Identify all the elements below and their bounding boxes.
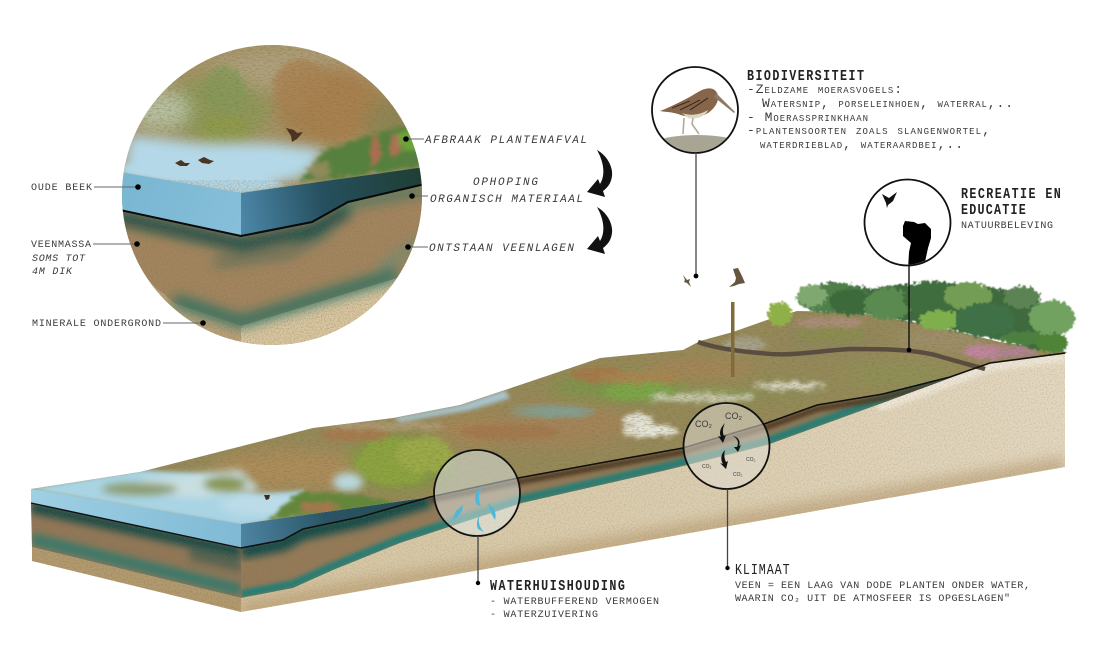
back lake strip bbox=[393, 390, 510, 422]
leader: recreatie bbox=[907, 266, 911, 352]
peat in circle bbox=[115, 184, 430, 326]
label: minerale ondergrond: MINERALE ONDERGROND bbox=[32, 319, 161, 330]
text: klimaat bbox=[735, 581, 1030, 605]
label: ophoping: OPHOPING bbox=[473, 177, 538, 189]
heading: waterhuishouding: WATERHUISHOUDING bbox=[490, 579, 625, 596]
circle: waterhuishouding bbox=[434, 450, 520, 536]
trees and shrubs bbox=[768, 281, 1075, 353]
zoom circle: peat profile bbox=[110, 44, 430, 350]
co2 labels bbox=[695, 411, 756, 478]
peat left face bbox=[31, 504, 241, 598]
text: biodiversiteit list: waterdrieblad, wateraardbei,.. bbox=[760, 137, 963, 152]
text: waterhuishouding list bbox=[490, 597, 659, 621]
text: waterhuishouding list: - WATERBUFFEREND VERMOGEN bbox=[490, 597, 659, 608]
blue water arrows bbox=[452, 485, 496, 532]
heading: recreatie en educatie: EDUCATIE bbox=[961, 203, 1026, 220]
bird silhouette bbox=[882, 192, 897, 208]
label: 4m dik: 4M DIK bbox=[32, 267, 73, 278]
heading: recreatie en educatie bbox=[961, 187, 1061, 220]
heading: biodiversiteit: BIODIVERSITEIT bbox=[747, 69, 864, 86]
water right face bbox=[241, 497, 430, 548]
surface vegetation bbox=[31, 311, 1067, 524]
wooden post bbox=[731, 302, 734, 377]
black surface line bbox=[241, 353, 1065, 548]
text: natuurbeleving: NATUURBELEVING bbox=[961, 221, 1053, 232]
label: veenmassa: VEENMASSA bbox=[31, 240, 91, 251]
co2 labels: CO₂ bbox=[733, 472, 742, 478]
water surface in circle bbox=[123, 135, 325, 193]
icon: recreation circle bbox=[864, 180, 950, 270]
leader: klimaat bbox=[725, 489, 730, 570]
arrow: ophoping bbox=[587, 150, 612, 197]
text: waterhuishouding list: - WATERZUIVERING bbox=[490, 610, 598, 621]
label: ontstaan veenlagen: ONTSTAAN VEENLAGEN bbox=[429, 243, 574, 255]
co2 labels: CO₂ bbox=[702, 464, 712, 470]
label: afbraak plantenafval: AFBRAAK PLANTENAFVAL bbox=[424, 135, 587, 147]
birds in circle bbox=[175, 128, 303, 166]
arrow: veenlagen bbox=[587, 207, 612, 254]
text: biodiversiteit list: Watersnip, porseleinhoen, waterral,.. bbox=[762, 96, 1013, 111]
text: biodiversiteit list bbox=[747, 82, 1013, 152]
water faces in circle bbox=[120, 172, 241, 236]
heading: klimaat: KLIMAAT bbox=[735, 563, 790, 580]
label: soms tot: SOMS TOT bbox=[32, 254, 86, 265]
water surface bbox=[25, 470, 305, 526]
silhouette of a birdwatcher bbox=[903, 221, 931, 264]
co2 labels: CO₂ bbox=[695, 419, 712, 429]
front shore plants bbox=[268, 492, 400, 520]
ground bbox=[664, 135, 726, 152]
co2 labels: CO₂ bbox=[725, 411, 742, 421]
leader lines and dots of the peat circle bbox=[93, 136, 428, 326]
black line in circle bbox=[120, 184, 425, 236]
text: klimaat: VEEN = EEN LAAG VAN DODE PLANTEN ONDER WATER, bbox=[735, 581, 1030, 592]
water left face bbox=[31, 489, 241, 548]
text: klimaat: WAARIN CO₂ UIT DE ATMOSFEER IS OPGESLAGEN" bbox=[735, 593, 1010, 605]
peat right face bbox=[241, 372, 966, 598]
sand in circle bbox=[241, 278, 396, 345]
circle: klimaat bbox=[684, 403, 770, 489]
birds in flight bbox=[683, 268, 745, 287]
leader: biodiversiteit bbox=[694, 153, 698, 278]
label: oude beek: OUDE BEEK bbox=[31, 183, 92, 194]
snipe body bbox=[660, 88, 718, 117]
terrain block cross-section bbox=[20, 281, 1080, 620]
text: biodiversiteit list: -plantensoorten zoals slangenwortel, bbox=[747, 123, 990, 138]
minerale ondergrond: sand right face bbox=[235, 345, 1070, 620]
minerale ondergrond: sand left face bbox=[32, 547, 241, 612]
icon: snipe circle bbox=[651, 67, 743, 157]
text: biodiversiteit list: - Moerassprinkhaan bbox=[747, 110, 868, 125]
black carbon arrows bbox=[718, 423, 741, 469]
text: biodiversiteit list: -Zeldzame moerasvogels: bbox=[747, 82, 902, 97]
label: organisch materiaal: ORGANISCH MATERIAAL bbox=[430, 194, 583, 206]
small bird on the water bbox=[264, 495, 270, 500]
marsh plants bbox=[300, 120, 425, 182]
leader: waterhuishouding bbox=[476, 536, 480, 585]
heading: recreatie en educatie: RECREATIE EN bbox=[961, 187, 1061, 204]
co2 labels: CO₂ bbox=[746, 457, 756, 463]
boardwalk bbox=[698, 342, 985, 369]
